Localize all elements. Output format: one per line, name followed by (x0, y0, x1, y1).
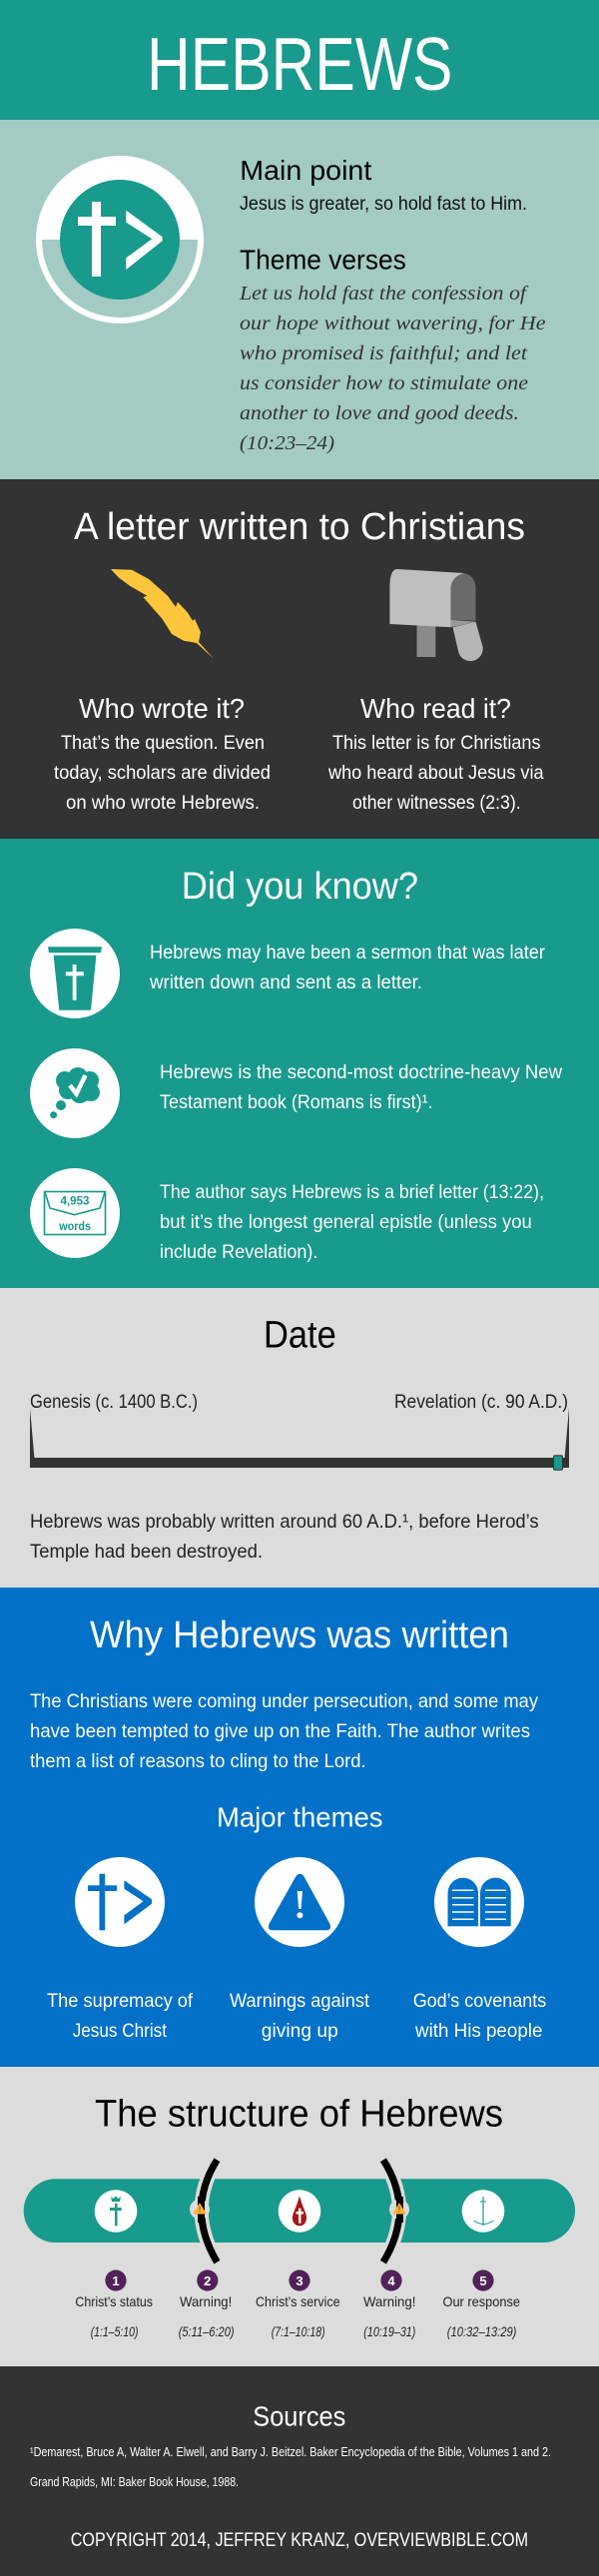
panel: date (0, 1288, 599, 1588)
text: source citation: Grand Rapids, MI: Baker Book House, 1988. (30, 2474, 239, 2489)
text: theme verses quote: who promised is faithful; and let (240, 342, 528, 364)
label: supremacy of Jesus (47, 1990, 194, 2042)
panel: header (0, 0, 599, 120)
text: source citation (30, 2444, 551, 2489)
text: sermon fact: Hebrews may have been a sermon that was later (150, 942, 545, 964)
icon: supremacy, cross and greater-than (75, 1857, 165, 1947)
text: doctrine fact: Testament book (Romans is first)¹. (160, 1091, 433, 1113)
panel: why Hebrews was written (0, 1588, 599, 2067)
step 2: warning: 2 (204, 2273, 211, 2288)
icon: mailbox (389, 569, 483, 661)
label: Genesis date: Genesis (c. 1400 B.C.) (30, 1391, 198, 1413)
step 3: Christ's service: (7:1–10:18) (272, 2324, 325, 2339)
text: who read it: This letter is for Christians (332, 732, 541, 754)
icon: sermon cup with cross (30, 929, 120, 1018)
text: length fact: The author says Hebrews is a brief letter (13:22), (160, 1181, 544, 1203)
label: covenants: God’s covenants (413, 1990, 546, 2012)
label: warnings: giving up (262, 2020, 338, 2042)
text: doctrine fact: Hebrews is the second-most doctrine-heavy New (160, 1061, 563, 1083)
text: who wrote it (54, 732, 271, 814)
step 1: Christ's status: Christ’s status (75, 2293, 153, 2309)
text: main point: Jesus is greater, so hold fast to Him. (240, 193, 527, 215)
panel: did you know (0, 839, 599, 1288)
heading: did you know: Did you know? (182, 866, 418, 908)
text: sermon fact (149, 942, 545, 993)
text: theme verses quote: us consider how to stimulate one (240, 372, 528, 394)
title: HEBREWS (147, 22, 453, 106)
step 5: our response (443, 2269, 520, 2339)
icon: envelope with word count: words (58, 1219, 91, 1233)
icon: crowned cross (95, 2190, 137, 2233)
text: theme verses quote: another to love and good deeds. (240, 402, 519, 424)
text: why written: have been tempted to give up on the Faith. The author writes (30, 1720, 530, 1742)
text: date explanation: Temple had been destroyed. (30, 1541, 263, 1563)
text: theme verses quote: Let us hold fast the confession of (239, 283, 530, 305)
timeline bar (30, 1408, 569, 1470)
step 5: our response: Our response (443, 2293, 520, 2309)
heading: who read it: Who read it? (360, 693, 511, 724)
label: covenants: with His people (414, 2020, 542, 2042)
icon: envelope with word count: 4,953 (60, 1196, 90, 1208)
step 3: Christ's service: Christ’s service (256, 2293, 340, 2309)
label: supremacy of Jesus: The supremacy of (47, 1990, 194, 2012)
text: date explanation (30, 1511, 539, 1563)
text: who wrote it: on who wrote Hebrews. (66, 792, 260, 814)
text: date explanation: Hebrews was probably written around 60 A.D.¹, before Herod’s (30, 1511, 539, 1533)
icon: book logo, cross and greater-than (36, 156, 204, 323)
text: length fact (160, 1181, 544, 1263)
text: who read it: other witnesses (2:3). (352, 792, 521, 814)
text: theme verses quote (239, 283, 545, 454)
label: covenants (413, 1990, 546, 2042)
heading: theme verses: Theme verses (240, 244, 406, 276)
icon: thought bubble with check (30, 1048, 120, 1138)
panel: a letter written to Christians (0, 479, 599, 839)
timeline marker (553, 1456, 563, 1470)
step 3: Christ's service: 3 (296, 2273, 303, 2288)
step 5: our response: 5 (479, 2273, 487, 2288)
text: who read it (327, 732, 544, 814)
step 5: our response: (10:32–13:29) (447, 2324, 516, 2339)
heading: why Hebrews was written: Why Hebrews was written (90, 1614, 509, 1656)
text: who wrote it: today, scholars are divided (54, 762, 271, 784)
text: theme verses quote: our hope without wavering, for He (240, 313, 545, 334)
heading: major themes: Major themes (217, 1801, 383, 1833)
icon: yellow quill feather (111, 569, 214, 659)
label: warnings (230, 1990, 370, 2042)
icon: warning right (393, 2204, 405, 2214)
label: supremacy of Jesus: Jesus Christ (73, 2020, 168, 2042)
step 1: Christ's status: (1:1–5:10) (91, 2324, 138, 2339)
step 1: Christ's status: 1 (112, 2273, 120, 2288)
heading: main point: Main point (240, 155, 372, 186)
heading: a letter written to Christians: A letter written to Christians (74, 506, 525, 548)
text: who read it: who heard about Jesus via (327, 762, 544, 784)
panel: sources and copyright (0, 2366, 599, 2576)
text: length fact: include Revelation). (160, 1241, 317, 1263)
label: Revelation date: Revelation (c. 90 A.D.) (394, 1391, 568, 1413)
icon: anchor (462, 2190, 504, 2233)
text: why written: The Christians were coming under persecution, and some may (30, 1690, 538, 1712)
step 2: warning (179, 2269, 235, 2339)
icon: tablets of the covenant (434, 1857, 524, 1947)
icon: warning left (194, 2204, 206, 2214)
step 4: warning: 4 (387, 2273, 395, 2288)
icon: blood drop with cross (279, 2190, 320, 2233)
heading: who wrote it: Who wrote it? (79, 693, 245, 724)
text: theme verses quote: (10:23–24) (240, 432, 334, 454)
step 4: warning: Warning! (363, 2293, 415, 2309)
heading: sources: Sources (253, 2400, 345, 2432)
text: who wrote it: That’s the question. Even (61, 732, 265, 754)
panel: main point and theme verses (0, 120, 599, 479)
icon: envelope with word count (30, 1168, 120, 1258)
diagram: structure pill with parentheses (24, 2152, 575, 2268)
step 3: Christ's service (256, 2269, 340, 2339)
icon: warning triangle (255, 1857, 344, 1947)
text: doctrine fact (160, 1061, 563, 1113)
step 4: warning (363, 2269, 415, 2339)
heading: structure of Hebrews: The structure of Hebrews (95, 2093, 503, 2135)
text: sermon fact: written down and sent as a letter. (149, 971, 422, 993)
heading: date: Date (264, 1314, 336, 1356)
text: why written (30, 1690, 538, 1772)
panel: structure of Hebrews (0, 2067, 599, 2366)
step 1: Christ's status (75, 2269, 153, 2339)
text: length fact: but it’s the longest general epistle (unless you (160, 1211, 532, 1233)
label: warnings: Warnings against (230, 1990, 370, 2012)
text: why written: them a list of reasons to cling to the Lord. (30, 1750, 366, 1772)
step 2: warning: Warning! (180, 2293, 232, 2309)
step 4: warning: (10:19–31) (363, 2324, 415, 2339)
step 2: warning: (5:11–6:20) (179, 2324, 235, 2339)
